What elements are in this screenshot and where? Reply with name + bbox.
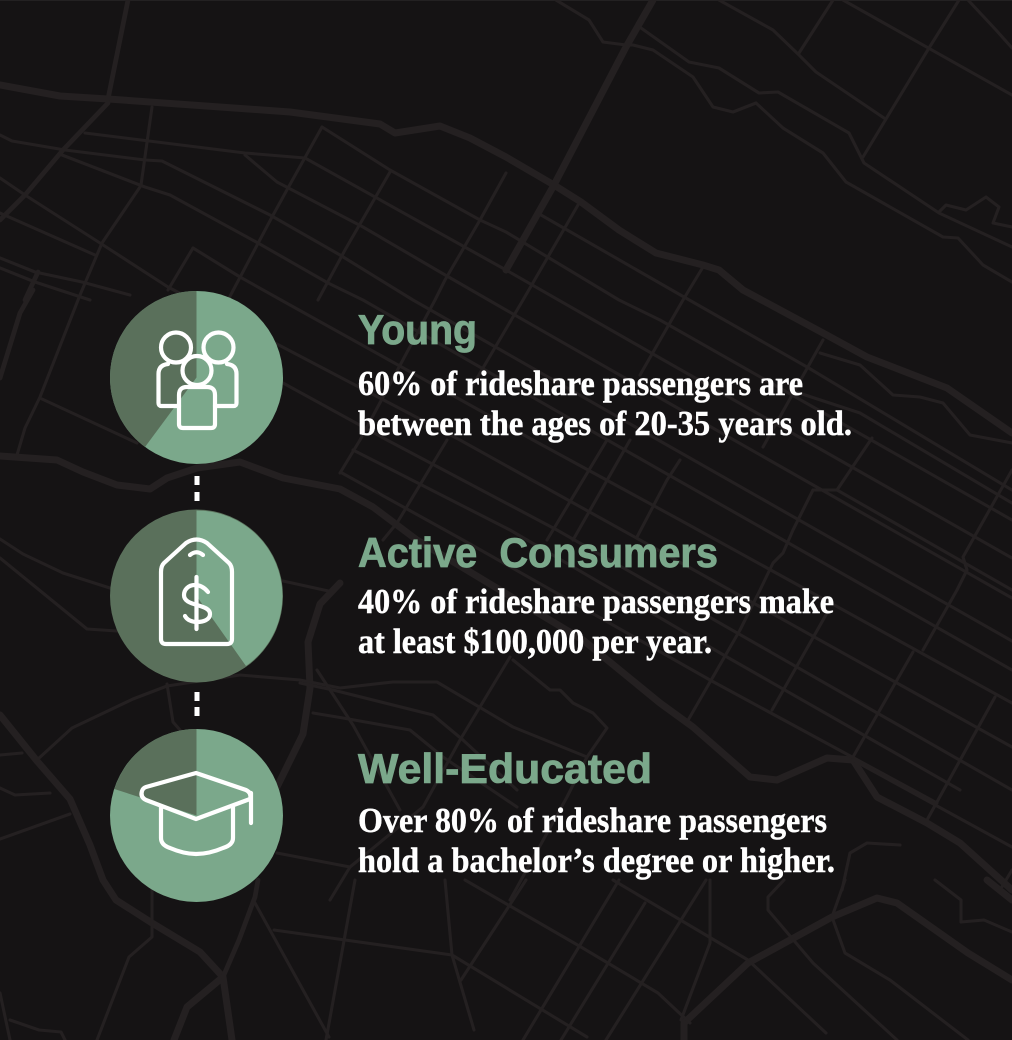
pie chart: 60 percent with people icon <box>110 291 283 464</box>
connector: dashes between young and active consumers <box>194 476 200 501</box>
heading: well-educated: Well-Educated <box>358 745 652 792</box>
heading: young: Young <box>358 306 477 353</box>
text block: young statistic: between the ages of 20-35 years old. <box>358 404 852 443</box>
icon: group of people <box>158 332 236 428</box>
heading: active consumers: Active Consumers <box>358 529 718 576</box>
text block: well-educated statistic: Over 80% of rideshare passengers <box>358 801 827 840</box>
icon: price tag with dollar sign <box>161 540 232 644</box>
text block: active consumers statistic: 40% of rideshare passengers make <box>358 582 834 621</box>
text block: active consumers statistic <box>358 582 834 661</box>
connector: dashes between active consumers and well-educated <box>194 692 200 716</box>
icon: graduation cap <box>142 773 251 854</box>
panel: well-educated <box>110 729 835 902</box>
text block: well-educated statistic: hold a bachelor’s degree or higher. <box>358 841 835 880</box>
text block: well-educated statistic <box>358 801 835 880</box>
pie chart: 80 percent with graduation cap icon <box>110 729 283 902</box>
text block: young statistic <box>358 364 852 443</box>
text block: young statistic: 60% of rideshare passengers are <box>358 364 803 403</box>
panel: young <box>110 291 852 464</box>
pie chart: 40 percent with price tag icon <box>110 510 283 682</box>
panel: active consumers <box>110 510 834 682</box>
text block: active consumers statistic: at least $100,000 per year. <box>358 622 712 661</box>
